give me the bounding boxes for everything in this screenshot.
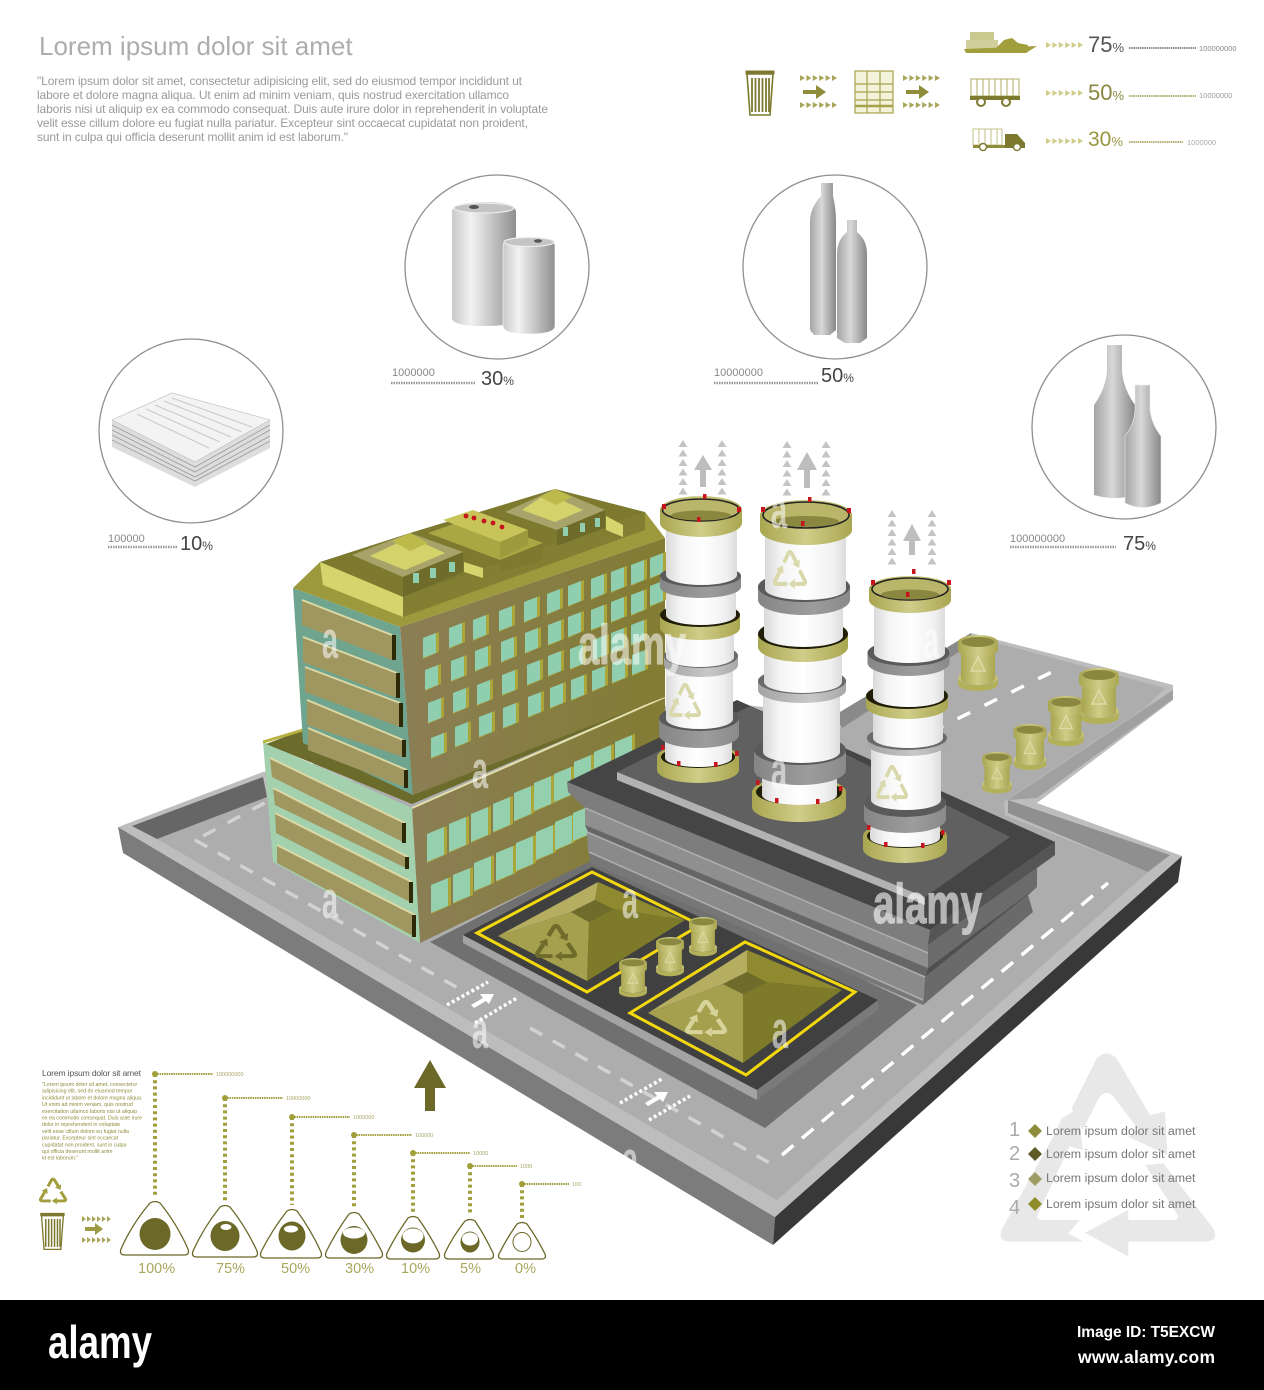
leader values: 1000	[520, 1164, 532, 1170]
transport row: truck 50%: 50%	[1088, 80, 1124, 105]
transport row: ship 75%	[964, 32, 1237, 57]
label: cans 30%: 30%	[481, 368, 514, 390]
stock photo footer: Image ID: T5EXCW	[1077, 1324, 1215, 1341]
bottom-left paragraph: exercitation ullamco laboris nisi ut aliquip	[42, 1109, 137, 1115]
bottom-left paragraph: cupidatat non proident, sunt in culpa	[42, 1142, 126, 1148]
windows: lower block	[427, 734, 635, 914]
label: cans 30%: 1000000	[392, 367, 435, 379]
stock photo footer	[0, 1300, 1264, 1390]
icon: delivery truck	[973, 129, 1025, 150]
leader lines	[155, 1074, 569, 1218]
alamy watermarks: alamy	[578, 613, 686, 676]
legend text: Lorem ipsum dolor sit amet	[1046, 1171, 1196, 1185]
percent labels: 30%	[345, 1261, 374, 1277]
label: plastic 50%: 10000000	[714, 367, 763, 379]
label: cans 30%	[391, 367, 514, 390]
alamy watermarks	[322, 481, 982, 1190]
title: Lorem ipsum dolor sit amet	[39, 31, 353, 61]
chimney 2	[752, 497, 852, 822]
plaza: pyramids and containers	[463, 867, 878, 1100]
panel: plastic bottles circle	[743, 175, 927, 359]
transport row: truck 50%: 10000000	[1199, 91, 1232, 100]
building: lower block	[263, 690, 665, 943]
label: paper 10%: 100000	[108, 533, 145, 545]
louvers: upper tower	[302, 600, 407, 788]
pyramid 1	[498, 882, 685, 981]
stock photo footer: alamy	[48, 1316, 152, 1368]
roof pyramid: left	[352, 533, 483, 597]
icon: recycle mark	[878, 767, 906, 802]
panel: glass bottles circle	[1032, 335, 1216, 519]
bottom-left paragraph: id est laborum."	[42, 1156, 78, 1162]
leader values: 100000	[415, 1133, 433, 1139]
legend markers	[1028, 1124, 1042, 1211]
label: glass 75%: 75%	[1123, 533, 1156, 555]
label: plastic 50%	[714, 365, 854, 387]
smoke arrows: chimney 3	[888, 510, 936, 564]
intro paragraph: sunt in culpa qui officia deserunt mollit anim id est laborum."	[37, 130, 348, 144]
leader values	[216, 1072, 581, 1188]
icon: compressed bale	[855, 71, 893, 113]
stock photo footer: www.alamy.com	[1077, 1347, 1215, 1367]
legend text: Lorem ipsum dolor sit amet	[1046, 1197, 1196, 1211]
recycling plant platform	[567, 700, 1055, 1005]
legend text: Lorem ipsum dolor sit amet	[1046, 1147, 1196, 1161]
legend numbers: 2	[1009, 1143, 1020, 1165]
bottom-left heading: Lorem ipsum dolor sit amet	[42, 1068, 142, 1078]
yellow frame: pyramid 2	[630, 942, 855, 1075]
leader values: 100000000	[216, 1072, 244, 1078]
arrows to fill scale	[82, 1216, 111, 1243]
pyramid 2	[648, 950, 842, 1063]
icon: glass bottles	[1094, 345, 1161, 508]
transport row: ship 75%: 100000000	[1199, 44, 1237, 53]
legend numbers	[1009, 1119, 1020, 1219]
label: plastic 50%: 50%	[821, 365, 854, 387]
leader dots	[152, 1071, 525, 1187]
containers on upper road	[958, 635, 1119, 793]
road arrows: second lane	[620, 1079, 690, 1120]
fill scale chart	[120, 1071, 581, 1277]
intro paragraph: laboris nisi ut aliquip ex ea commodo consequat. Duis aute irure dolor in reprehenderit in voluptate	[37, 102, 548, 116]
smoke arrows: chimney 2	[782, 441, 830, 496]
process flow: bin to bale	[746, 71, 940, 115]
icon: flatbed truck	[970, 79, 1020, 106]
louvers: lower block	[270, 758, 415, 937]
road markings	[195, 672, 1108, 1166]
transport row: truck 50%	[970, 79, 1232, 106]
bottom-left paragraph: adipisicing elit, sed do eiusmod tempor	[42, 1089, 133, 1095]
leader values: 10000	[473, 1151, 488, 1157]
icon: cargo ship	[964, 32, 1037, 53]
smoke arrows: chimney 1	[678, 440, 726, 494]
triangle outlines	[120, 1202, 546, 1259]
leader values: 10000000	[286, 1096, 310, 1102]
icon: recycle mark	[671, 685, 699, 720]
alamy watermarks: alamy	[873, 872, 982, 935]
transport row: van 30%	[973, 128, 1216, 151]
chimney 1	[657, 494, 742, 783]
plaza base	[430, 855, 917, 1128]
roof pyramid: right	[505, 489, 623, 546]
bottom-left paragraph: "Lorem ipsum dolor sit amet, consectetur	[42, 1082, 137, 1088]
icon: trash bin small	[41, 1213, 64, 1249]
fill level circles	[140, 1218, 531, 1254]
label: glass 75%: 100000000	[1010, 533, 1065, 545]
bottom-left paragraph: ex ea commodo consequat. Duis aute irure	[42, 1116, 142, 1122]
icon: recycle mark small	[40, 1179, 66, 1204]
legend numbers: 1	[1009, 1119, 1020, 1141]
legend numbers: 4	[1009, 1197, 1020, 1219]
legend text: Lorem ipsum dolor sit amet	[1046, 1124, 1196, 1138]
intro paragraph	[37, 74, 548, 144]
bottom-left paragraph: pariatur. Excepteur sint occaecat	[42, 1136, 119, 1142]
panel: paper circle	[99, 339, 283, 523]
leader values: 1000000	[353, 1115, 374, 1121]
arrows: bale to transport	[903, 75, 940, 108]
bottom-left paragraph: dolor in reprehenderit in voluptate	[42, 1122, 120, 1128]
bottom-left paragraph: incididunt ut labore et dolore magna aliqua.	[42, 1095, 142, 1101]
transport row: van 30%: 30%	[1088, 128, 1123, 151]
bottom-left paragraph: velit esse cillum dolore eu fugiat nulla	[42, 1129, 129, 1135]
percent labels	[138, 1261, 536, 1277]
windows: upper tower	[423, 552, 666, 759]
transport row: van 30%: 1000000	[1187, 138, 1216, 147]
icon: paper stack	[112, 393, 270, 487]
building: upper tower	[293, 489, 666, 795]
up arrow	[414, 1060, 446, 1111]
intro paragraph: "Lorem ipsum dolor sit amet, consectetur adipisicing elit, sed do eiusmod tempor incididunt ut	[37, 74, 523, 88]
leader values: 100	[572, 1182, 581, 1188]
label: paper 10%	[108, 533, 213, 555]
legend numbers: 3	[1009, 1170, 1020, 1192]
label: paper 10%: 10%	[180, 533, 213, 555]
intro paragraph: velit esse cillum dolore eu fugiat nulla pariatur. Excepteur sint occaecat cupidatat non proident,	[37, 116, 528, 130]
icon: plastic bottles	[810, 183, 867, 343]
bottom-left paragraph: Ut enim ad minim veniam, quis nostrud	[42, 1102, 133, 1108]
icon: recycle mark	[775, 552, 805, 589]
bottom-left paragraph	[42, 1082, 142, 1162]
road base	[118, 633, 1182, 1245]
icon: trash bin	[746, 71, 774, 115]
bottom-left paragraph: qui officia deserunt mollit anim	[42, 1149, 113, 1155]
percent labels: 0%	[515, 1261, 536, 1277]
legend	[1001, 1053, 1215, 1257]
roof block: centre	[428, 510, 543, 572]
yellow frame: pyramid 1	[477, 872, 700, 992]
percent labels: 100%	[138, 1261, 175, 1277]
panel: cans circle	[405, 175, 589, 359]
percent labels: 50%	[281, 1261, 310, 1277]
chimney 3	[863, 569, 951, 863]
tower roof	[293, 489, 665, 627]
road arrows: first lane	[447, 982, 517, 1023]
legend text	[1046, 1124, 1196, 1211]
arrows: bin to bale	[800, 75, 837, 108]
containers on plaza	[619, 917, 717, 997]
label: glass 75%	[1010, 533, 1156, 555]
icon: large recycle mark	[1001, 1053, 1215, 1257]
intro paragraph: labore et dolore magna aliqua. Ut enim ad minim veniam, quis nostrud exercitation ullamco	[37, 88, 509, 102]
percent labels: 10%	[401, 1261, 430, 1277]
percent labels: 5%	[460, 1261, 481, 1277]
percent labels: 75%	[216, 1261, 245, 1277]
transport row: ship 75%: 75%	[1088, 32, 1124, 57]
icon: cans	[452, 202, 555, 334]
